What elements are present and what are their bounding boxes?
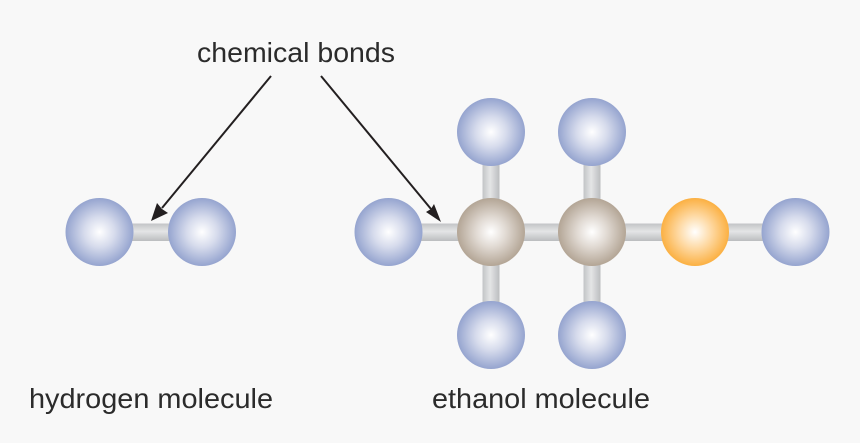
atom: hydrogen bottom 1 (457, 301, 525, 369)
atom: hydrogen right (168, 198, 236, 266)
arrow: to hydrogen bond (151, 76, 271, 221)
atom: hydrogen right (762, 198, 830, 266)
atom: hydrogen left (354, 198, 422, 266)
atom: hydrogen left (66, 198, 134, 266)
atom: carbon 2 (558, 198, 626, 266)
label: ethanol molecule: ethanol molecule (432, 383, 650, 414)
atom: carbon 1 (457, 198, 525, 266)
label: hydrogen molecule: hydrogen molecule (29, 383, 273, 414)
heading: chemical bonds: chemical bonds (197, 37, 395, 68)
bond: vertical carbon 2 (584, 160, 600, 310)
atom: oxygen (661, 198, 729, 266)
hydrogen molecule (66, 198, 236, 266)
ethanol molecule (354, 98, 830, 369)
atom: hydrogen top 1 (457, 98, 525, 166)
bonds: horizontal chain (420, 224, 765, 241)
atom: hydrogen top 2 (558, 98, 626, 166)
arrow: to ethanol bond (321, 76, 441, 222)
atom: hydrogen bottom 2 (558, 301, 626, 369)
bond: hydrogen (130, 224, 172, 241)
bond: vertical carbon 1 (482, 160, 500, 310)
